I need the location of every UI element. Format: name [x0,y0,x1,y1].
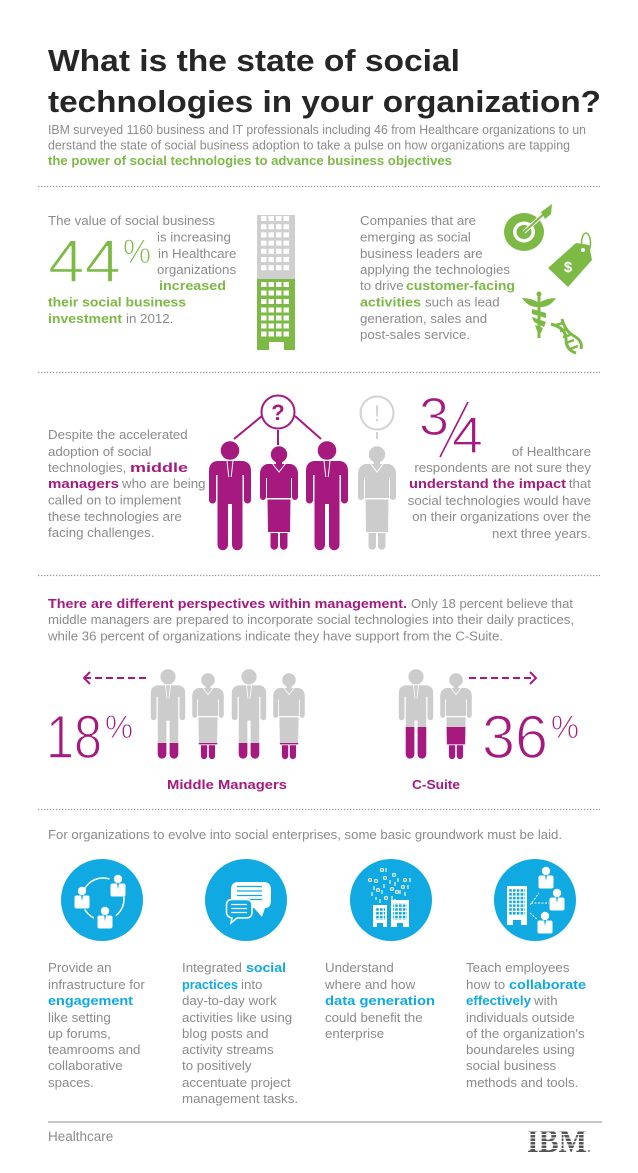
panel: perspectives text: while 36 percent of organizations indicate they have support from the C-Suite. [47,628,503,644]
panel: 44 percent text: in 2012. [126,311,173,326]
column: collaborate text: effectively [466,993,532,1008]
panel: 44 percent text: their social business [48,294,186,310]
panel: customer-facing text: applying the technologies [360,262,510,277]
column: engagement text: like setting [48,1010,111,1025]
panel: middle managers text: technologies, [48,460,126,475]
panel: three quarters text: that [569,476,591,491]
panel: 44 percent text: investment [48,311,123,326]
panel: customer-facing text [360,213,515,342]
groundwork heading: For organizations to evolve into social enterprises, some basic groundwork must be laid. [48,827,562,842]
panel: middle managers text: these technologies are [48,509,182,524]
title: technologies in your organization? [48,84,601,119]
column: social practices text [182,960,298,1106]
panel: middle managers text: middle [130,460,188,475]
column: collaborate text: of the organization's [466,1026,585,1041]
panel: customer-facing text: business leaders are [360,246,483,261]
intro text: derstand the state of social business adoption to take a pulse on how organizations are tapping [48,138,570,152]
column: collaborate text [466,960,586,1090]
column: collaborate text: Teach employees [466,960,570,975]
panel: middle managers text: facing challenges. [48,525,154,540]
icon: exclamation circle [360,396,394,439]
panel: perspectives text: There are different perspectives within management. [48,596,407,611]
icon: social practices circle [205,859,287,941]
column: collaborate text: boundareles using [466,1042,575,1057]
column: social practices text: practices [182,977,238,992]
panel: 44 percent text: is increasing [157,230,231,244]
icon: target [504,204,552,251]
label: middle managers: Middle Managers [167,777,287,792]
icon: data generation circle [350,859,432,941]
icon: exclamation circle: ! [374,401,380,426]
panel: middle managers text: adoption of social [48,444,152,459]
column: engagement text: spaces. [48,1075,94,1090]
panel: 44 percent text: organizations [157,262,236,277]
column: engagement text: engagement [48,993,134,1008]
statistic: three quarters: 4 [452,407,483,465]
icon: magenta woman manager [260,446,298,550]
statistic: 18 percent: 18 [46,703,102,771]
panel: 44 percent text: in Healthcare [158,246,236,261]
column: collaborate text: methods and tools. [466,1075,578,1090]
column: social practices text: social [246,960,286,975]
intro text [48,122,586,168]
column: collaborate text: collaborate [509,977,586,992]
panel: customer-facing text: to drive [360,278,404,293]
icon: collaborate circle [494,859,576,941]
panel: customer-facing text: emerging as social [360,230,471,244]
panel: middle managers text: Despite the accelerated [48,427,188,442]
column: engagement text: collaborative [48,1058,123,1073]
column: data generation text: enterprise [325,1026,384,1041]
column: social practices text: blog posts and [182,1026,268,1041]
panel: 44 percent text: The value of social business [48,213,215,228]
column: social practices text: management tasks. [182,1091,298,1106]
statistic: 18 percent: % [105,709,133,745]
column: engagement text: infrastructure for [48,977,145,992]
column: social practices text: accentuate project [182,1075,291,1090]
column: social practices text: into [241,977,262,992]
footer rule [48,1121,602,1123]
panel: customer-facing text: generation, sales and [360,311,487,326]
panel: three quarters text: of Healthcare [512,444,591,459]
intro text: the power of social technologies to advance business objectives [48,153,452,168]
column: collaborate text: with [533,993,558,1008]
panel: middle managers text: called on to implement [48,492,181,508]
panel: 44 percent text [48,213,236,326]
icon: question mark circle and connectors [234,396,321,445]
statistic: three quarters [419,387,483,465]
column: social practices text: day-to-day work [182,993,277,1008]
column: engagement text [48,960,145,1090]
logo: IBM: IBM [527,1124,587,1160]
column: engagement text: teamrooms and [48,1042,140,1057]
column: social practices text: to positively [182,1058,252,1073]
column: collaborate text: social business [466,1058,557,1073]
icon: building chart [257,215,295,350]
footer label: Healthcare [48,1129,113,1144]
panel: three quarters text [408,444,591,541]
panel: 44 percent text: increased [159,278,226,293]
icon: price tag [548,233,592,287]
statistic: 44 percent [48,228,151,295]
panel: customer-facing text: activities [360,294,421,310]
column: data generation text: where and how [324,977,416,992]
title: What is the state of social [48,43,460,78]
column: social practices text: activities like using [182,1010,292,1025]
panel: three quarters text: social technologies would have [408,493,591,508]
panel: three quarters text: understand the impact [409,476,567,491]
column: data generation text: data generation [325,993,435,1008]
column: data generation text: could benefit the [325,1010,423,1025]
column: collaborate text: how to [466,977,505,992]
column: engagement text: up forums, [48,1026,111,1041]
icon: gray woman [358,446,396,550]
icon: engagement circle [61,859,143,941]
column: collaborate text: individuals outside [466,1010,575,1025]
icon: DNA [551,319,581,353]
column: engagement text: Provide an [48,960,112,975]
statistic: three quarters: 3 [419,387,449,447]
panel: customer-facing text: Companies that are [360,213,476,228]
column: data generation text [324,960,435,1041]
panel: three quarters text: on their organizations over the [412,509,591,524]
statistic: 36 percent: % [551,709,579,745]
icon: magenta manager 1 [209,441,251,550]
arrow: right [469,672,536,684]
panel: middle managers text: managers [48,476,119,491]
panel: middle managers text [48,427,206,540]
icon: question mark circle and connectors: ? [271,400,285,425]
panel: customer-facing text: post-sales service. [360,327,470,342]
panel: perspectives text: Only 18 percent believe that [411,596,573,611]
statistic: 36 percent [482,703,579,771]
panel: customer-facing text: such as lead [425,294,500,310]
panel: customer-facing text: customer-facing [406,278,515,293]
arrow: left [84,672,149,684]
chart: c-suite figures [399,669,472,759]
intro text: IBM surveyed 1160 business and IT professionals including 46 from Healthcare organizations to un [48,122,586,137]
statistic: 36 percent: 36 [482,703,548,771]
panel: three quarters text: respondents are not sure they [414,460,591,475]
panel: middle managers text: who are being [121,476,206,491]
column: data generation text: Understand [325,960,394,975]
label: c-suite: C-Suite [412,777,460,792]
title [48,43,601,119]
panel: perspectives text: middle managers are prepared to incorporate social technologies into their daily practices, [48,612,574,627]
statistic: 44 percent: % [123,233,151,271]
icon: price tag: $ [564,259,573,276]
statistic: 44 percent: 44 [48,228,121,295]
panel: three quarters text: next three years. [492,526,591,541]
icon: magenta manager 2 [306,441,348,550]
icon: caduceus [522,292,556,338]
column: social practices text: activity streams [182,1042,274,1057]
column: social practices text: Integrated [182,960,242,975]
chart: middle manager figures [151,669,305,759]
panel: perspectives text [47,596,574,644]
